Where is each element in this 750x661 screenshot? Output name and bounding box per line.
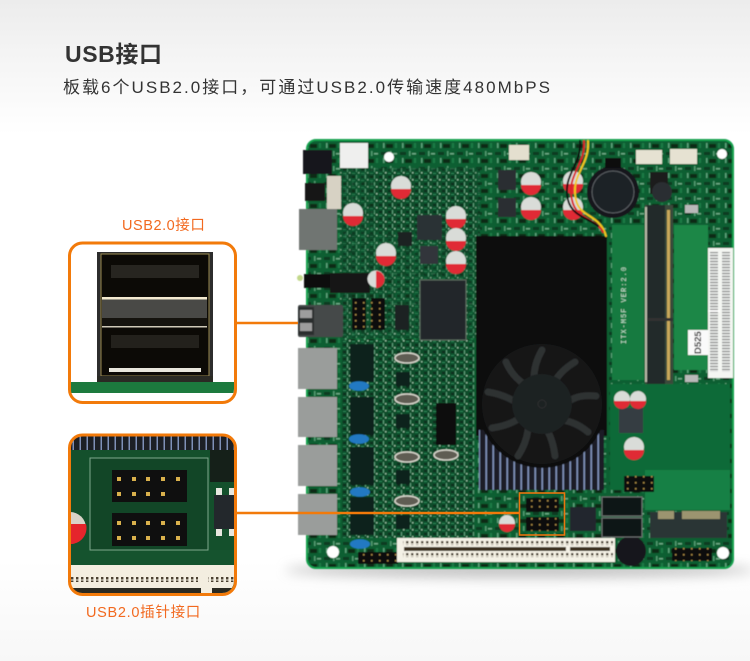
RAM slot bbox=[645, 205, 698, 384]
fan wires bbox=[567, 141, 606, 236]
mSATA slot bbox=[650, 511, 727, 538]
panel: USB2.0 port photo bbox=[71, 252, 234, 393]
PCB base bbox=[307, 140, 733, 568]
cooling fan bbox=[478, 340, 606, 468]
PCI slot bbox=[397, 538, 615, 562]
LAN transformers bbox=[350, 344, 410, 535]
DIP chip bbox=[570, 507, 596, 531]
board shadow bbox=[285, 562, 750, 578]
header pin blocks bbox=[352, 298, 712, 564]
label: USB2.0 port: USB2.0接口 bbox=[122, 218, 205, 234]
USB pin headers bbox=[526, 498, 559, 531]
title: USB接口 bbox=[65, 41, 163, 67]
heatsink bbox=[476, 236, 607, 490]
coin battery bbox=[587, 158, 639, 218]
buzzer bbox=[616, 536, 646, 566]
mounting holes bbox=[327, 149, 729, 559]
ICs bbox=[395, 170, 672, 445]
rear connectors bbox=[297, 143, 697, 535]
red capacitors bbox=[343, 171, 646, 532]
panel: USB2.0 pin header photo bbox=[71, 436, 234, 593]
DIP chip crop bbox=[214, 495, 235, 529]
callout line: pin header bbox=[236, 512, 519, 514]
PCB strip bbox=[70, 382, 235, 393]
heatsink fins bbox=[70, 436, 235, 450]
version text: ITX-M5F VER:2.0 bbox=[621, 266, 629, 344]
callout line: USB port bbox=[236, 322, 298, 324]
D525 sticker bbox=[688, 330, 708, 355]
D525 sticker: D525 bbox=[693, 331, 704, 354]
header USB1 bbox=[112, 470, 187, 502]
panel border 1 bbox=[70, 243, 236, 402]
motherboard bbox=[297, 140, 733, 568]
PCI slot crop bbox=[70, 565, 235, 595]
serial labels bbox=[708, 248, 733, 378]
subtitle text: 板载6个USB2.0接口，可通过USB2.0传输速度480MbPS bbox=[63, 78, 552, 97]
blue capacitors bbox=[349, 381, 370, 549]
red capacitor crop bbox=[71, 512, 86, 544]
light green regions bbox=[674, 225, 708, 370]
header USB2 bbox=[112, 513, 187, 546]
crystals bbox=[395, 353, 458, 506]
SATA connectors bbox=[602, 497, 642, 537]
label: USB2.0 pin header: USB2.0插针接口 bbox=[86, 605, 201, 621]
panel border 2 bbox=[70, 435, 236, 594]
highlight box: pin headers bbox=[520, 493, 564, 535]
